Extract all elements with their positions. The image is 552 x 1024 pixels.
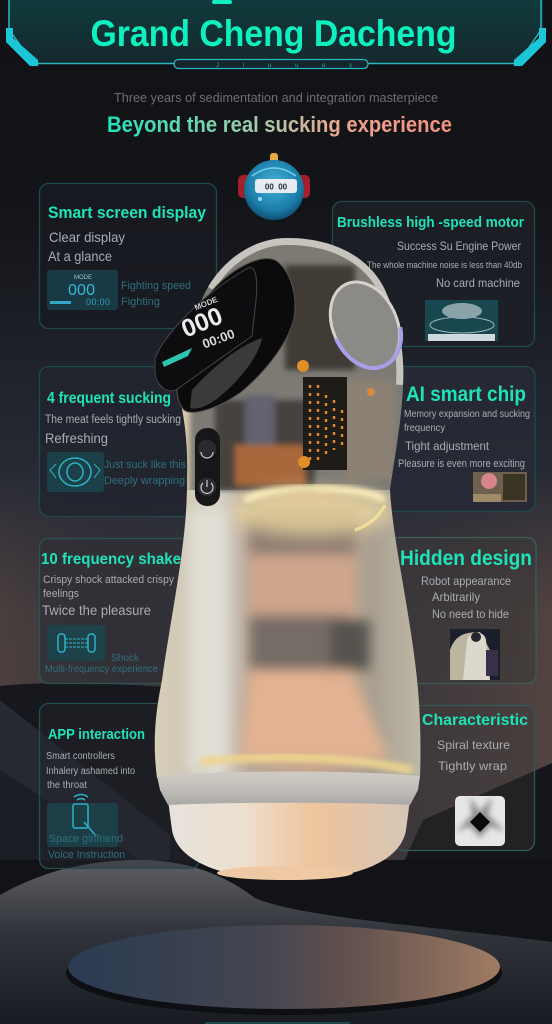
image: motor (425, 300, 498, 341)
banner pill: J l u u u y (216, 63, 352, 69)
image: hidden device (450, 629, 500, 680)
device shell (150, 235, 430, 780)
banner corner left (6, 28, 38, 66)
caption: Fighting speed (121, 280, 191, 292)
stage platform (0, 860, 552, 1024)
motor dial (317, 271, 413, 379)
panel: APP interaction: Inhalery ashamed into (46, 766, 135, 777)
dome rim (208, 238, 403, 385)
panel: APP interaction: the throat (47, 780, 87, 791)
text: Smart controllers (46, 751, 115, 762)
banner corner right (514, 28, 546, 66)
panel: smart screen display: Fighting (121, 296, 160, 308)
chip board (297, 360, 375, 470)
heading: Characteristic (422, 712, 528, 729)
icon: remote (47, 794, 118, 847)
panel: 4 frequent sucking (40, 366, 220, 516)
head internals (182, 262, 396, 511)
banner pill (174, 60, 368, 69)
image: texture (455, 796, 505, 846)
background glow (0, 505, 552, 858)
panel: APP interaction: Voice Instruction (48, 849, 125, 861)
icon: display: 00:00 (86, 297, 110, 307)
recess inner grey (190, 338, 262, 409)
panel: APP interaction (40, 704, 200, 868)
heading: 4 frequent sucking (47, 390, 171, 407)
heading: AI smart chip (406, 383, 526, 406)
screen: MODE (193, 295, 219, 312)
buttons (195, 428, 220, 506)
panel: characteristic: Tightly wrap (438, 759, 507, 773)
screen: 00:00 (200, 326, 237, 352)
heading: APP interaction (48, 726, 145, 743)
text: Clear display (49, 229, 125, 245)
heading: 10 frequency shake (41, 551, 181, 568)
tagline: Three years of sedimentation and integration masterpiece (114, 91, 438, 105)
base ring (157, 772, 420, 805)
sleeve shades (187, 510, 390, 770)
panel: 10 frequency shake (40, 538, 200, 684)
image: chip (473, 472, 527, 502)
caption: Just suck like this (104, 459, 186, 471)
background hills (0, 683, 552, 1024)
title: Grand Cheng Dacheng (90, 13, 456, 54)
title descender fragment (212, 0, 232, 4)
panel: AI smart chip: Pleasure is even more exciting (398, 458, 525, 470)
caption: Space girlfriend (49, 833, 123, 845)
text: Memory expansion and sucking (404, 409, 530, 420)
text: The meat feels tightly sucking (45, 414, 181, 426)
icon: robot mascot (238, 153, 310, 220)
base cap (168, 800, 410, 880)
header banner (6, 0, 546, 69)
heading: Hidden design (400, 547, 532, 570)
cap opening (217, 866, 353, 880)
icon: display: 000 (68, 282, 95, 299)
panel: AI smart chip: frequency (404, 423, 445, 434)
panel: brushless motor: No card machine (436, 276, 520, 290)
icon: display: MODE (74, 275, 92, 281)
heading: Smart screen display (48, 203, 207, 222)
panel: hidden design (385, 538, 536, 684)
text: Success Su Engine Power (397, 239, 521, 253)
panel: AI smart chip: Tight adjustment (405, 439, 490, 453)
panel: 10 frequency shake: Multi-frequency experience (45, 663, 158, 675)
panel: smart screen display (40, 184, 216, 328)
screen (155, 268, 257, 391)
text: Robot appearance (421, 574, 511, 588)
panel: 10 frequency shake: feelings (43, 588, 79, 600)
product illustration (150, 235, 430, 880)
banner frame (9, 0, 541, 64)
panel: characteristic (395, 706, 534, 850)
icon: wrap (47, 452, 104, 492)
icon: robot mascot: 00 00 (265, 182, 288, 192)
heading: Brushless high -speed motor (337, 214, 524, 231)
glowing rim (230, 488, 394, 536)
panel: hidden design: Arbitrarily (432, 590, 480, 604)
icon: display (47, 270, 118, 310)
panel: brushless motor: The whole machine noise is less than 40db (367, 260, 522, 270)
panel: smart screen display: At a glance (48, 248, 112, 264)
panel: AI smart chip (380, 366, 535, 512)
subtitle: Beyond the real sucking experience (107, 112, 452, 137)
panel: hidden design: No need to hide (432, 607, 509, 621)
lower clear body (150, 490, 430, 780)
black recess (177, 258, 295, 412)
panel: 10 frequency shake: Twice the pleasure (42, 602, 151, 618)
lower glow band (200, 757, 412, 770)
text: Spiral texture (437, 738, 510, 752)
icon: shake (47, 625, 105, 661)
caption: Shock (111, 652, 140, 664)
screen: 000 (177, 302, 227, 343)
panel: brushless motor (332, 202, 534, 346)
head translucent body (182, 238, 404, 497)
text: Crispy shock attacked crispy (43, 574, 174, 586)
panel: 4 frequent sucking: Refreshing (45, 430, 108, 446)
panel: 4 frequent sucking: Deeply wrapping (104, 475, 185, 487)
